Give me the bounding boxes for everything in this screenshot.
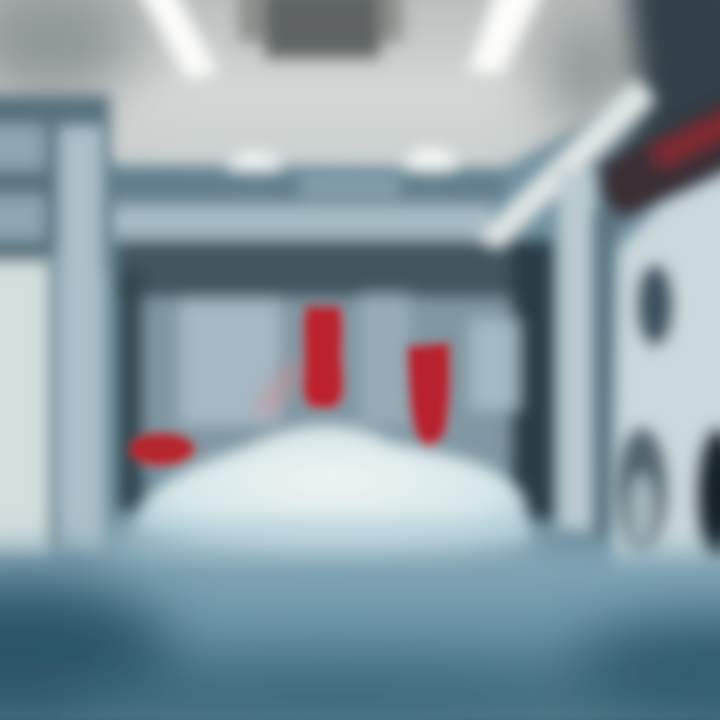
ceiling shaded corners xyxy=(0,0,640,130)
red object on floor left xyxy=(129,432,195,466)
machine window xyxy=(638,265,672,345)
washing machine xyxy=(612,160,720,580)
recessed lights xyxy=(227,148,458,188)
mound base haze xyxy=(100,524,540,556)
left wall xyxy=(0,95,110,562)
right beam and pillar xyxy=(478,78,656,530)
back wall structure xyxy=(105,172,556,520)
floor base xyxy=(0,620,720,720)
machine drums xyxy=(617,428,720,561)
floor dark corners xyxy=(0,580,720,720)
top right dark corner xyxy=(600,0,720,200)
left pillar xyxy=(58,125,104,555)
faint red reflection xyxy=(250,355,305,418)
ceiling light strips xyxy=(135,0,546,80)
red canister right xyxy=(407,342,450,446)
foam mound xyxy=(135,425,530,546)
ceiling xyxy=(0,0,720,170)
red canister left xyxy=(302,306,344,408)
floor xyxy=(0,552,720,720)
right dark band with red xyxy=(595,85,720,540)
ceiling vent xyxy=(238,0,403,58)
